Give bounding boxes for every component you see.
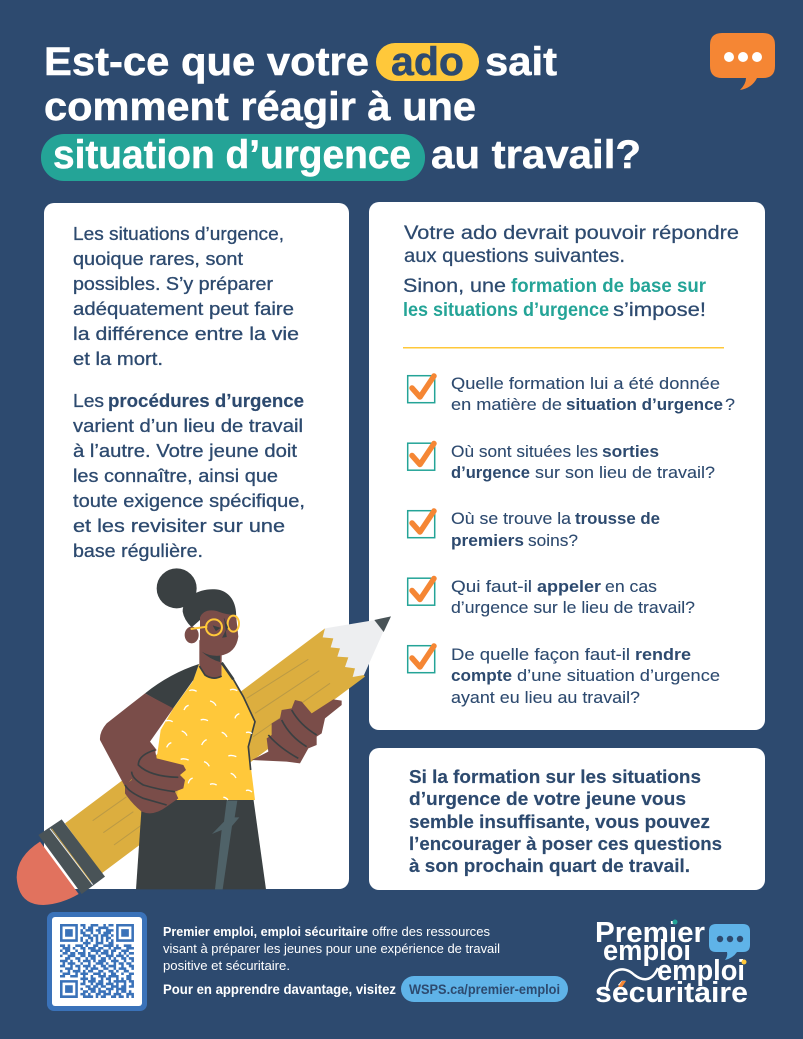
QR code — [47, 912, 147, 1011]
question 2: Où sont situées les — [451, 442, 598, 461]
panel: advice callout: d’urgence de votre jeune vous — [409, 788, 686, 809]
question 2: sur son lieu de travail? — [535, 463, 715, 482]
text block: questions intro: formation de base sur — [511, 276, 707, 297]
question 5: rendre — [635, 645, 691, 664]
text block: intro paragraph 2: procédures d’urgence — [108, 390, 304, 411]
question 1: situation d’urgence — [566, 395, 723, 414]
text block: footer description: positive et sécuritaire. — [163, 958, 290, 973]
text block: intro paragraph 2: varient d’un lieu de travail — [73, 415, 303, 436]
text block: footer description: Premier emploi, emploi sécuritaire — [163, 924, 368, 939]
question 5: d’une situation d’urgence — [517, 666, 720, 685]
question 3 — [451, 509, 660, 550]
illustration: young woman holding a giant pencil — [17, 568, 391, 905]
title: comment réagir à une — [44, 85, 476, 129]
icon: checkbox 1 — [408, 376, 435, 403]
logo: Premier emploi, emploi sécuritaire — [595, 917, 750, 1009]
icon: checkbox 5 — [408, 646, 435, 673]
question 1: en matière de — [451, 395, 562, 414]
question 2 — [451, 442, 715, 482]
title: Est-ce que votre — [44, 40, 369, 84]
link pill — [401, 976, 568, 1002]
text block: questions intro: s’impose! — [613, 299, 706, 321]
icon: checkbox 4 — [408, 578, 435, 605]
text block: footer description: offre des ressources — [372, 924, 490, 939]
text block: questions intro: Votre ado devrait pouvoir répondre — [404, 222, 739, 244]
question 3: trousse de — [575, 509, 660, 528]
question 5: De quelle façon faut-il — [451, 645, 630, 664]
text block: intro paragraph 2: et les revisiter sur une — [73, 515, 285, 536]
panel: advice callout: semble insuffisante, — [409, 811, 590, 832]
text block: intro paragraph 1 — [73, 223, 299, 369]
question 1 — [451, 374, 735, 414]
question 2: d’urgence — [451, 463, 530, 482]
text block: questions intro: Sinon, une — [403, 275, 506, 297]
question 4: Qui faut-il — [451, 577, 532, 596]
icon: checkbox 3 — [408, 511, 435, 538]
panel: intro text — [44, 203, 349, 889]
text block: intro paragraph 2: Les — [73, 390, 104, 411]
question 3: soins? — [528, 531, 578, 550]
title: au travail? — [431, 133, 641, 177]
question 1: ? — [725, 395, 735, 414]
text block: intro paragraph 2: à l’autre. Votre jeune doit — [73, 440, 297, 461]
question 3: Où se trouve la — [451, 509, 572, 528]
panel: advice callout: Si la formation sur les situations — [409, 766, 701, 787]
question 4: en cas — [605, 577, 657, 596]
panel: advice callout: l’encourager à poser ces questions — [409, 833, 722, 854]
logo: Premier emploi, emploi sécuritaire: Premier — [595, 917, 705, 949]
text block: questions intro: les situations d’urgence — [403, 300, 609, 321]
text block: intro paragraph 2: toute exigence spécifique, — [73, 490, 305, 511]
text block: footer description: Pour en apprendre davantage, visitez — [163, 982, 396, 997]
title: ado — [391, 40, 464, 84]
text block: questions intro: aux questions suivantes. — [404, 245, 625, 267]
question 4: appeler — [537, 577, 601, 596]
question 4: d’urgence sur le lieu de travail? — [451, 598, 695, 617]
text block: footer description — [163, 924, 500, 997]
icon: orange speech bubble — [710, 33, 775, 90]
text block: intro paragraph 1: adéquatement peut faire — [73, 298, 294, 319]
panel: advice callout: à son prochain quart de travail. — [409, 855, 690, 876]
text block: intro paragraph 1: la différence entre la vie — [73, 323, 299, 344]
logo: Premier emploi, emploi sécuritaire: emploi — [603, 935, 691, 967]
text block: intro paragraph 1: possibles. S’y préparer — [73, 273, 273, 294]
logo: Premier emploi, emploi sécuritaire: emploi — [657, 955, 745, 987]
panel: questions — [369, 202, 765, 730]
text block: intro paragraph 1: et la mort. — [73, 348, 163, 369]
text block: questions intro — [403, 222, 739, 321]
question 5: compte — [451, 666, 512, 685]
question 5: ayant eu lieu au travail? — [451, 688, 640, 707]
link pill: WSPS.ca/premier-emploi — [409, 982, 560, 997]
panel: advice callout: vous pouvez — [595, 811, 710, 832]
logo: Premier emploi, emploi sécuritaire: sécuritaire — [595, 977, 748, 1009]
title: situation d’urgence — [53, 133, 411, 177]
text block: intro paragraph 2: base régulière. — [73, 540, 203, 561]
text block: footer description: visant à préparer les jeunes pour une expérience de travail — [163, 941, 500, 956]
icon: checkbox 2 — [408, 443, 435, 470]
question 1: Quelle formation lui a été donnée — [451, 374, 720, 393]
title — [41, 40, 641, 181]
question 4 — [451, 577, 695, 617]
text block: intro paragraph 2 — [73, 390, 305, 561]
text block: intro paragraph 1: quoique rares, sont — [73, 248, 243, 269]
question 3: premiers — [451, 531, 524, 550]
question 5 — [451, 645, 720, 707]
question 2: sorties — [602, 442, 659, 461]
text block: intro paragraph 1: Les situations d’urgence, — [73, 223, 284, 244]
text block: intro paragraph 2: les connaître, ainsi que — [73, 465, 278, 486]
title: sait — [485, 40, 557, 84]
panel: advice callout — [369, 748, 765, 890]
